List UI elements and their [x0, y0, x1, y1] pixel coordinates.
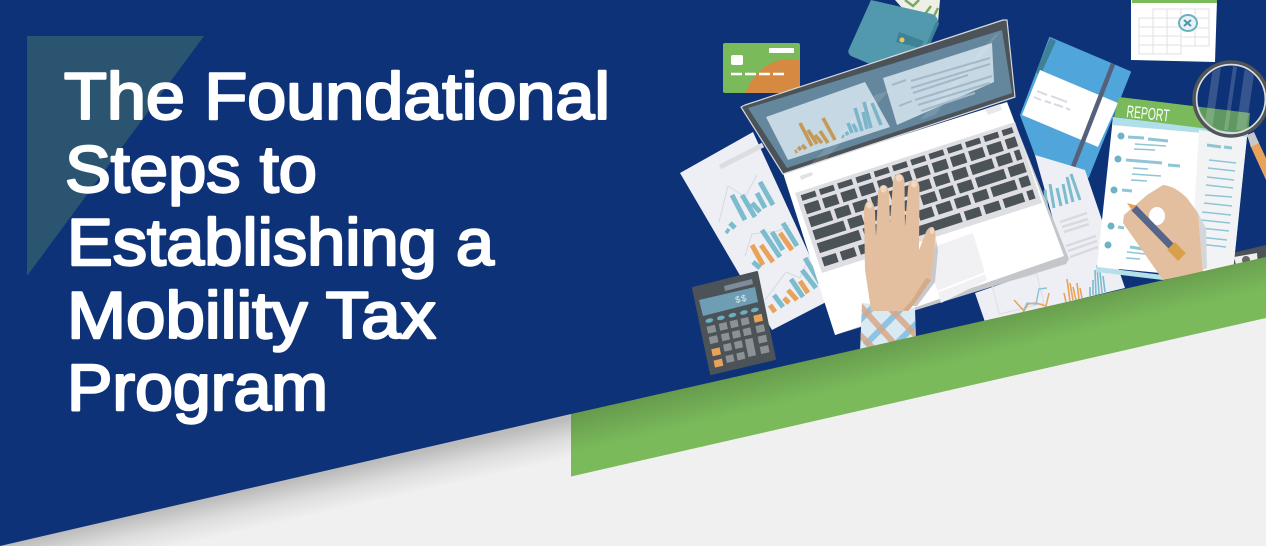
- icon: picture frame corner: [1228, 245, 1266, 290]
- title: Establishing a: [67, 205, 494, 279]
- title: Steps to: [65, 132, 317, 206]
- icon: calculator: $$: [734, 293, 748, 305]
- teal accent triangle: [27, 36, 204, 276]
- report label: REPORT: [1126, 102, 1170, 125]
- keyboard: [795, 122, 1042, 273]
- document: report: [1096, 97, 1250, 280]
- illustration: desk with laptop and documents: [680, 0, 1266, 374]
- title: The Foundational: [64, 59, 610, 133]
- light grey lower wedge: [0, 300, 1266, 546]
- icon: notebook: [1021, 38, 1130, 177]
- icon: pen: [1127, 203, 1182, 257]
- title: Program: [67, 350, 328, 424]
- icon: laptop: [741, 20, 1069, 335]
- title: [64, 59, 610, 424]
- icon: calculator: [693, 272, 775, 374]
- icon: plaid shirt cuff: [860, 303, 916, 349]
- document: chart sheet left: [680, 132, 830, 330]
- chart: blue bars: [726, 182, 773, 232]
- laptop screen: [741, 20, 1015, 174]
- icon: magnifying glass: [1194, 60, 1266, 180]
- trackpad: [925, 233, 987, 303]
- chart: lower bars: [770, 258, 820, 312]
- document: chart sheet right: [975, 155, 1125, 322]
- chart: orange and blue bars: [752, 223, 797, 268]
- icon: writing hand: [1123, 185, 1207, 280]
- icon: typing hand: [864, 174, 938, 311]
- screen text lines: [892, 58, 992, 111]
- green diagonal band: [571, 257, 1266, 476]
- title: Mobility Tax: [67, 278, 436, 352]
- icon: credit card: [723, 43, 800, 93]
- screen chart: blue bars: [842, 102, 881, 137]
- icon: calendar: [1131, 0, 1217, 62]
- icon: wallet: [848, 0, 940, 64]
- laptop base: [835, 102, 1069, 335]
- screen chart: gold bars: [795, 118, 835, 152]
